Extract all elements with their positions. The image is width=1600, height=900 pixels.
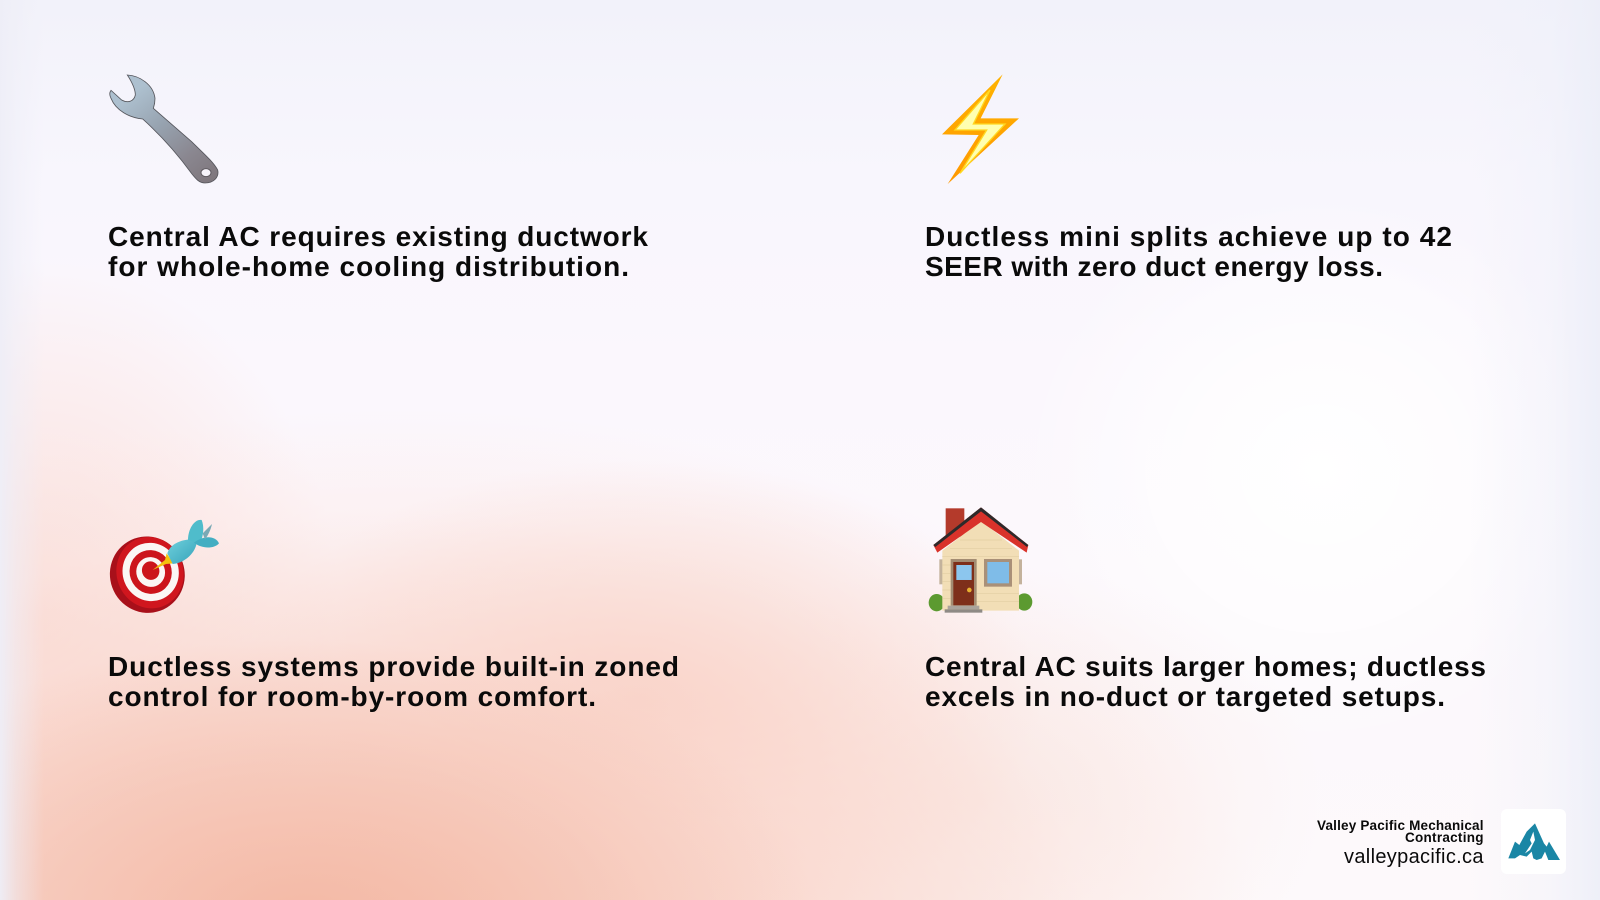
- text: ductless zoned control: Ductless systems provide built-in zoned: [108, 651, 679, 682]
- company name: Contracting: [1405, 830, 1484, 845]
- icon: house: [929, 507, 1032, 613]
- company name: [1317, 818, 1484, 845]
- logo: mountain: [1501, 809, 1566, 874]
- panel: zoned control: [99, 520, 679, 712]
- text: ductless zoned control: control for room-by-room comfort.: [108, 681, 596, 712]
- website: valleypacific.ca: [1344, 846, 1484, 868]
- text: ductless zoned control: [108, 651, 679, 712]
- text: central AC requires ductwork: Central AC requires existing ductwork: [108, 221, 648, 252]
- text: central vs ductless homes: [925, 651, 1486, 712]
- icon: target and dart: [99, 520, 219, 623]
- text: central AC requires ductwork: for whole-home cooling distribution.: [108, 251, 629, 282]
- text: central vs ductless homes: excels in no-duct or targeted setups.: [925, 681, 1445, 712]
- text: central vs ductless homes: Central AC suits larger homes; ductless: [925, 651, 1486, 682]
- text: ductless mini splits: SEER with zero duct energy loss.: [925, 251, 1383, 282]
- panel: ductless SEER: [925, 74, 1452, 282]
- panel: home suitability: [925, 507, 1486, 712]
- text: central AC requires ductwork: [108, 221, 648, 282]
- brand footer: [1317, 809, 1566, 874]
- text: ductless mini splits: [925, 221, 1452, 282]
- text: ductless mini splits: Ductless mini splits achieve up to 42: [925, 221, 1452, 252]
- icon: wrench: [110, 75, 218, 183]
- panel: central AC ductwork: [108, 75, 648, 282]
- icon: lightning bolt: [942, 74, 1019, 184]
- company name: Valley Pacific Mechanical: [1317, 818, 1484, 833]
